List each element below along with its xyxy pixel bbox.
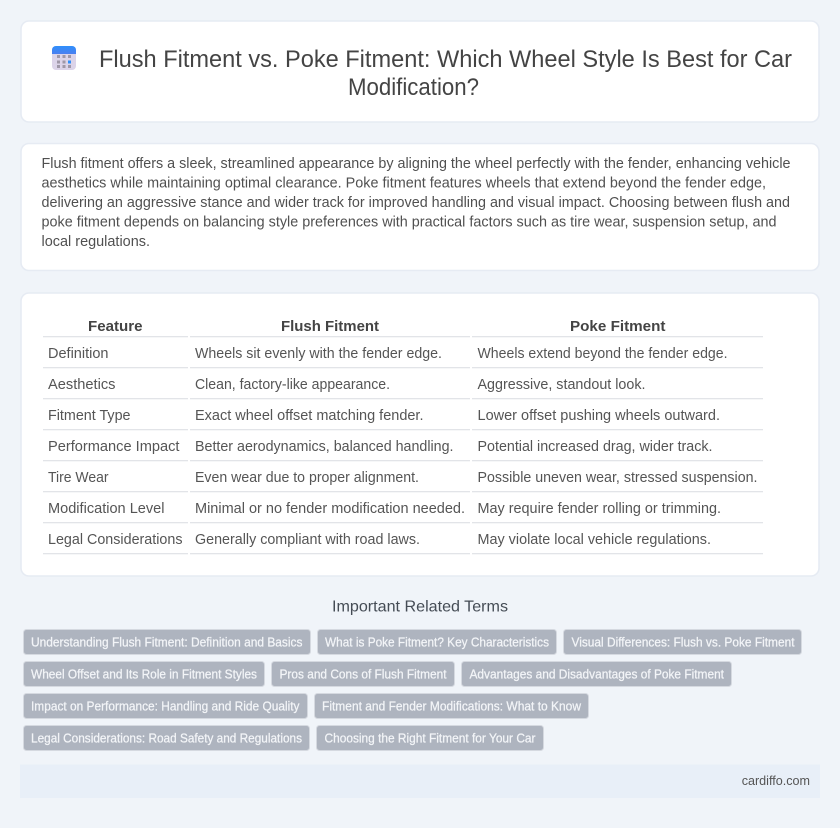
chip: [24, 726, 310, 750]
row: legal considerations: May violate local vehicle regulations.: [478, 532, 711, 548]
row: aesthetics: Clean, factory-like appearance.: [195, 377, 390, 393]
chip: What is Poke Fitment? Key Characteristics: [325, 634, 549, 650]
chip: [462, 662, 732, 686]
heading: important related terms: Important Related Terms: [332, 598, 508, 616]
chip: Choosing the Right Fitment for Your Car: [324, 730, 536, 746]
row: fitment type: Lower offset pushing wheels outward.: [478, 408, 720, 424]
table header row: Feature: [88, 318, 142, 335]
chip: Impact on Performance: Handling and Ride Quality: [31, 698, 300, 714]
chip: Advantages and Disadvantages of Poke Fitment: [470, 666, 724, 682]
chip: [272, 662, 454, 686]
row: fitment type: [48, 408, 720, 424]
row: performance impact: Performance Impact: [48, 439, 180, 455]
chip: [564, 630, 802, 654]
row: definition: Wheels sit evenly with the fender edge.: [195, 346, 442, 362]
row: tire wear: Tire Wear: [48, 470, 109, 486]
row: definition: [48, 346, 728, 362]
row: fitment type: Fitment Type: [48, 408, 130, 424]
footer: cardiffo.com: [742, 773, 810, 788]
row: aesthetics: Aggressive, standout look.: [478, 377, 646, 393]
chip: [318, 630, 556, 654]
table header row: Poke Fitment: [570, 318, 666, 335]
row: modification level: Modification Level: [48, 501, 164, 517]
text block: summary: [42, 155, 790, 250]
chip: Fitment and Fender Modifications: What to Know: [322, 698, 582, 714]
table header row: [88, 318, 666, 335]
row: modification level: Minimal or no fender modification needed.: [195, 501, 465, 517]
row: definition: Definition: [48, 346, 108, 362]
title: Flush Fitment vs. Poke Fitment: Which Wheel Style Is Best for Car: [99, 46, 792, 73]
chip: Legal Considerations: Road Safety and Regulations: [31, 730, 302, 746]
text block: summary: delivering an aggressive stance and wider track for improved handling and visual impact. Choosing between flush and: [42, 194, 790, 211]
row: definition: Wheels extend beyond the fender edge.: [478, 346, 728, 362]
text block: summary: poke fitment depends on balancing style preferences with practical factors such as tire wear, suspension setup, and: [42, 214, 776, 230]
row: modification level: May require fender rolling or trimming.: [478, 501, 721, 517]
title: Modification?: [348, 74, 479, 101]
footer: [20, 764, 820, 798]
chip: [316, 726, 544, 750]
chip: [314, 694, 588, 718]
text block: summary: aesthetics while maintaining optimal clearance. Poke fitment features wheels that extend beyond the fender edge,: [42, 174, 766, 192]
row: aesthetics: Aesthetics: [48, 377, 116, 393]
table header row: Flush Fitment: [281, 318, 379, 335]
icon: calendar: [52, 46, 76, 70]
chip: [24, 694, 308, 718]
text block: summary: local regulations.: [42, 233, 150, 250]
chip: Pros and Cons of Flush Fitment: [280, 666, 447, 682]
row: performance impact: Potential increased drag, wider track.: [478, 439, 712, 455]
row: legal considerations: [48, 532, 711, 548]
chip: [24, 662, 264, 686]
panel: summary paragraph: [21, 144, 819, 270]
row: modification level: [48, 501, 721, 517]
row: tire wear: Possible uneven wear, stressed suspension.: [478, 470, 758, 486]
related terms chips: [24, 630, 802, 750]
row: tire wear: Even wear due to proper alignment.: [195, 470, 419, 486]
title: [99, 46, 792, 101]
row: aesthetics: [48, 377, 646, 393]
row: performance impact: [48, 439, 712, 455]
chip: Visual Differences: Flush vs. Poke Fitment: [572, 634, 795, 650]
row: performance impact: Better aerodynamics, balanced handling.: [195, 439, 454, 455]
chip: Wheel Offset and Its Role in Fitment Styles: [31, 666, 257, 682]
chip: Understanding Flush Fitment: Definition and Basics: [31, 634, 303, 650]
row: legal considerations: Legal Considerations: [48, 532, 182, 548]
panel: header: [21, 21, 819, 122]
row: tire wear: [48, 470, 758, 486]
chip: [24, 630, 310, 654]
panel: comparison table: [21, 293, 819, 576]
row: legal considerations: Generally compliant with road laws.: [195, 532, 420, 548]
row: fitment type: Exact wheel offset matching fender.: [195, 408, 424, 424]
text block: summary: Flush fitment offers a sleek, streamlined appearance by aligning the wheel perfectly with the fender, enhancing vehicle: [42, 155, 790, 172]
